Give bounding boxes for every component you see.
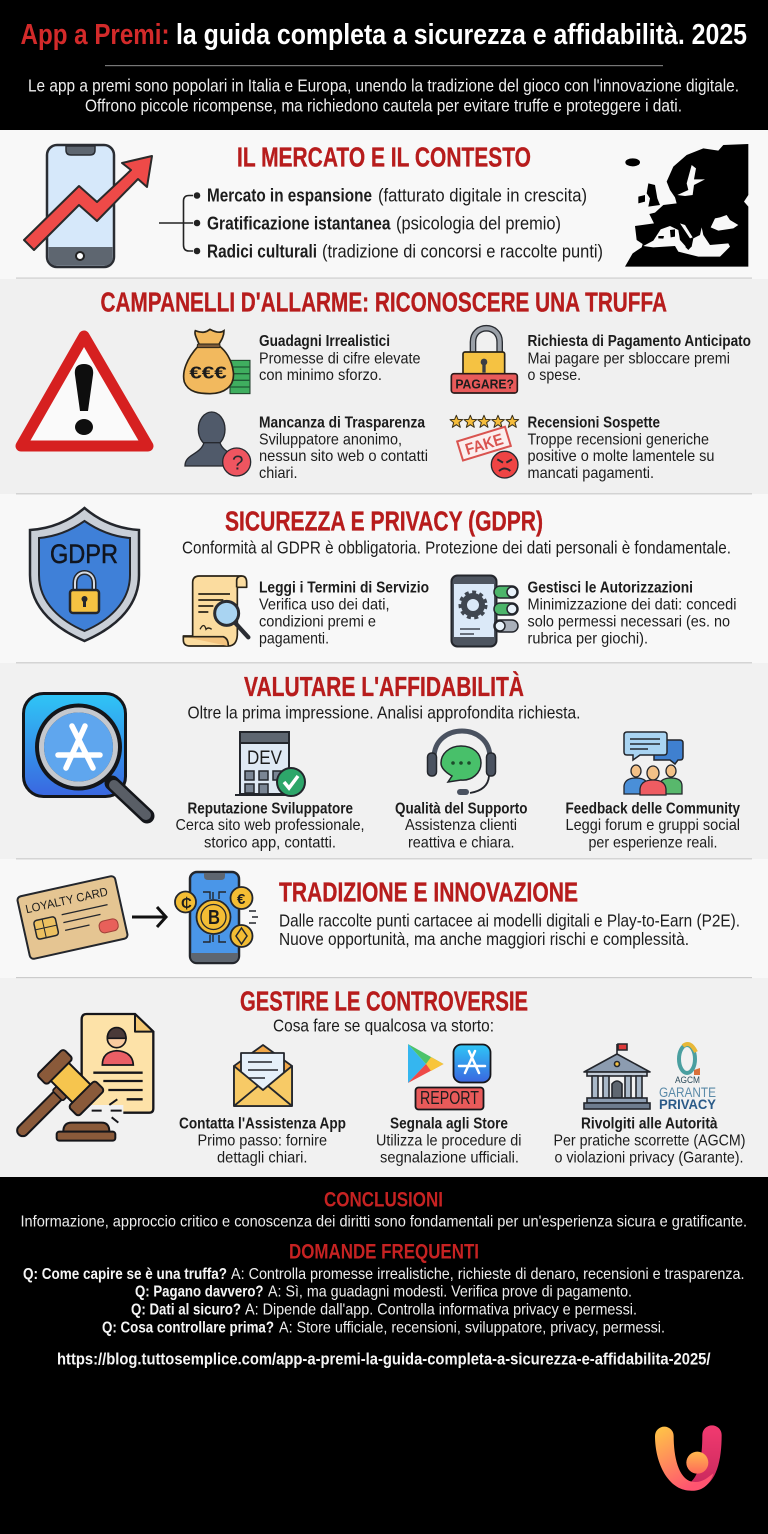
bullet list: (fatturato digitale in crescita): [378, 184, 587, 206]
icon: crypto phone: B: [208, 907, 220, 929]
faq list: Q: Pagano davvero?: [135, 1284, 264, 1301]
panel: valutare l'affidabilità: [24, 671, 740, 851]
icon: warning triangle: [21, 336, 148, 446]
bullet list: [207, 184, 603, 262]
text: qualità del supporto: Qualità del Supporto: [395, 800, 528, 817]
faq list: A: Store ufficiale, recensioni, sviluppatore, privacy, permessi.: [279, 1319, 665, 1336]
text: gestisci le autorizzazioni: [528, 580, 736, 647]
text block: Nuove opportunità, ma anche maggiori rischi e complessità.: [279, 929, 689, 949]
text: gestisci le autorizzazioni: Gestisci le Autorizzazioni: [528, 580, 693, 597]
text: recensioni sospette: Troppe recensioni generiche: [528, 431, 709, 448]
icon: padlock pagare: [451, 328, 517, 393]
text: segnala agli store: Segnala agli Store: [390, 1115, 508, 1132]
text: guadagni irrealistici: con minimo sforzo.: [259, 367, 382, 384]
text: contatta l'assistenza: Contatta l'Assistenza App: [179, 1115, 346, 1132]
icon: gavel and document: [0, 1014, 153, 1155]
text: mancanza di trasparenza: [259, 414, 428, 482]
text block: [279, 911, 740, 949]
text: mancanza di trasparenza: chiari.: [259, 465, 298, 482]
icon: institution building: [584, 1044, 650, 1109]
icon: community: [624, 732, 683, 795]
text: feedback delle community: [566, 800, 740, 851]
footer panel: [20, 1188, 747, 1491]
icon: developer building: [235, 732, 305, 796]
text: rivolgiti alle autorità: o violazioni privacy (Garante).: [554, 1150, 744, 1167]
text: reputazione sviluppatore: [176, 800, 364, 851]
bullet list: (tradizione di concorsi e raccolte punti): [322, 240, 603, 262]
logo: agcm and garante privacy: AGCM: [675, 1075, 700, 1085]
header: [20, 19, 747, 116]
bullet list: (psicologia del premio): [396, 212, 561, 234]
icon: anonymous person: [185, 412, 251, 476]
text: qualità del supporto: Assistenza clienti: [405, 817, 517, 834]
text: mancanza di trasparenza: nessun sito web o contatti: [259, 448, 428, 465]
text: guadagni irrealistici: [259, 333, 421, 384]
panel: il mercato e il contesto: [24, 142, 748, 267]
heading: IL MERCATO E IL CONTESTO: [237, 142, 531, 172]
text: segnala agli store: [376, 1115, 522, 1167]
text: reputazione sviluppatore: Cerca sito web professionale,: [176, 817, 364, 834]
icon: money bag: [184, 329, 250, 394]
icon: gdpr shield: [30, 508, 139, 641]
heading: domande frequenti: DOMANDE FREQUENTI: [289, 1240, 479, 1263]
bullet list: Mercato in espansione: [207, 184, 372, 206]
icon: store report: REPORT: [420, 1088, 479, 1108]
icon: crypto phone: ₵: [181, 895, 192, 912]
faq list: Q: Come capire se è una truffa?: [23, 1266, 227, 1283]
text: contatta l'assistenza: dettagli chiari.: [217, 1150, 308, 1167]
text: richiesta di pagamento: o spese.: [528, 367, 581, 384]
icon: anonymous person: ?: [232, 451, 243, 474]
icon: loyalty card: [17, 875, 128, 960]
faq list: Q: Cosa controllare prima?: [102, 1319, 274, 1336]
panel: tradizione e innovazione: [17, 872, 740, 963]
title: App a Premi:: [20, 19, 170, 51]
text: termini di servizio: Leggi i Termini di Servizio: [259, 580, 429, 597]
text: gestisci le autorizzazioni: solo permessi necessari (es. no: [528, 614, 730, 631]
logo: agcm and garante privacy: [659, 1044, 716, 1112]
icon: crypto phone: [175, 872, 258, 963]
heading: SICUREZZA E PRIVACY (GDPR): [225, 506, 543, 536]
text: segnala agli store: Utilizza le procedure di: [376, 1133, 522, 1150]
subheading: Cosa fare se qualcosa va storto:: [273, 1016, 494, 1036]
text: rivolgiti alle autorità: Per pratiche scorrette (AGCM): [554, 1133, 746, 1150]
icon: support headset: [428, 731, 496, 795]
icon: permissions phone: [452, 576, 518, 646]
icon: terms scroll: [183, 576, 248, 646]
subheading: Oltre la prima impressione. Analisi approfondita richiesta.: [188, 702, 580, 722]
text: contatta l'assistenza: [179, 1115, 346, 1167]
text: segnala agli store: segnalazione ufficiali.: [380, 1150, 519, 1167]
icon: fake reviews: FAKE: [463, 431, 506, 459]
logo: agcm and garante privacy: GARANTE: [659, 1085, 716, 1100]
panel: campanelli d'allarme: [21, 286, 751, 482]
text: rivolgiti alle autorità: [554, 1115, 746, 1167]
faq list: A: Sì, ma guadagni modesti. Verifica prove di pagamento.: [268, 1284, 632, 1301]
logo: agcm and garante privacy: PRIVACY: [659, 1097, 716, 1112]
text: termini di servizio: Verifica uso dei dati,: [259, 597, 390, 614]
text: guadagni irrealistici: Promesse di cifre elevate: [259, 350, 421, 367]
heading: conclusioni: CONCLUSIONI: [324, 1188, 443, 1212]
text: gestisci le autorizzazioni: Minimizzazione dei dati: concedi: [528, 597, 736, 614]
text: termini di servizio: pagamenti.: [259, 630, 329, 647]
icon: developer building: DEV: [247, 748, 282, 769]
heading: GESTIRE LE CONTROVERSIE: [240, 986, 528, 1016]
icon: fake reviews: [450, 415, 519, 478]
text: reputazione sviluppatore: Reputazione Sviluppatore: [188, 800, 353, 817]
icon: crypto phone: €: [237, 891, 246, 908]
icon: gdpr shield: GDPR: [50, 539, 118, 569]
text: richiesta di pagamento: Mai pagare per sbloccare premi: [528, 350, 730, 367]
text: guadagni irrealistici: Guadagni Irrealistici: [259, 333, 390, 350]
text: gestisci le autorizzazioni: rubrica per giochi).: [528, 630, 648, 647]
text: richiesta di pagamento: [528, 333, 751, 384]
intro text: Offrono piccole ricompense, ma richiedono cautela per evitare truffe e proteggere i dati.: [85, 96, 682, 116]
text: termini di servizio: [259, 580, 429, 647]
bracket connector: [159, 193, 200, 254]
text: recensioni sospette: positive o molte lamentele su: [528, 448, 714, 465]
icon: padlock pagare: PAGARE?: [455, 377, 514, 391]
intro text: [28, 76, 739, 116]
text: qualità del supporto: [395, 800, 528, 851]
icon: loyalty card: LOYALTY CARD: [24, 884, 109, 916]
text: qualità del supporto: reattiva e chiara.: [408, 834, 514, 851]
icon: app store with magnifier: [24, 694, 147, 816]
text: contatta l'assistenza: Primo passo: fornire: [198, 1133, 327, 1150]
heading: TRADIZIONE E INNOVAZIONE: [279, 876, 578, 908]
icon: phone with rising arrow: [24, 145, 152, 267]
faq list: Q: Dati al sicuro?: [131, 1301, 241, 1318]
text: feedback delle community: per esperienze reali.: [588, 834, 718, 851]
text: mancanza di trasparenza: Sviluppatore anonimo,: [259, 431, 402, 448]
bullet list: Radici culturali: [207, 240, 317, 262]
text: recensioni sospette: mancati pagamenti.: [528, 465, 654, 482]
faq list: A: Dipende dall'app. Controlla informativa privacy e permessi.: [245, 1301, 637, 1318]
map of europe: [625, 144, 748, 267]
icon: money bag: €€€: [189, 363, 227, 383]
faq list: [23, 1266, 744, 1336]
icon: store report: [408, 1044, 490, 1110]
text: recensioni sospette: Recensioni Sospette: [528, 414, 660, 431]
text: mancanza di trasparenza: Mancanza di Trasparenza: [259, 414, 425, 431]
bullet list: Gratificazione istantanea: [207, 212, 391, 234]
text: termini di servizio: condizioni premi e: [259, 614, 376, 631]
heading: VALUTARE L'AFFIDABILITÀ: [244, 671, 524, 702]
panel: gestire le controversie: [0, 986, 745, 1167]
icon: envelope: [234, 1045, 292, 1106]
arrow: [132, 907, 166, 927]
text: recensioni sospette: [528, 414, 714, 482]
text: rivolgiti alle autorità: Rivolgiti alle Autorità: [581, 1115, 718, 1132]
text: feedback delle community: Feedback delle Community: [566, 800, 740, 817]
panel: sicurezza e privacy: [30, 506, 736, 647]
logo: [655, 1425, 722, 1491]
text: reputazione sviluppatore: storico app, contatti.: [204, 834, 336, 851]
text: feedback delle community: Leggi forum e gruppi social: [566, 817, 740, 834]
